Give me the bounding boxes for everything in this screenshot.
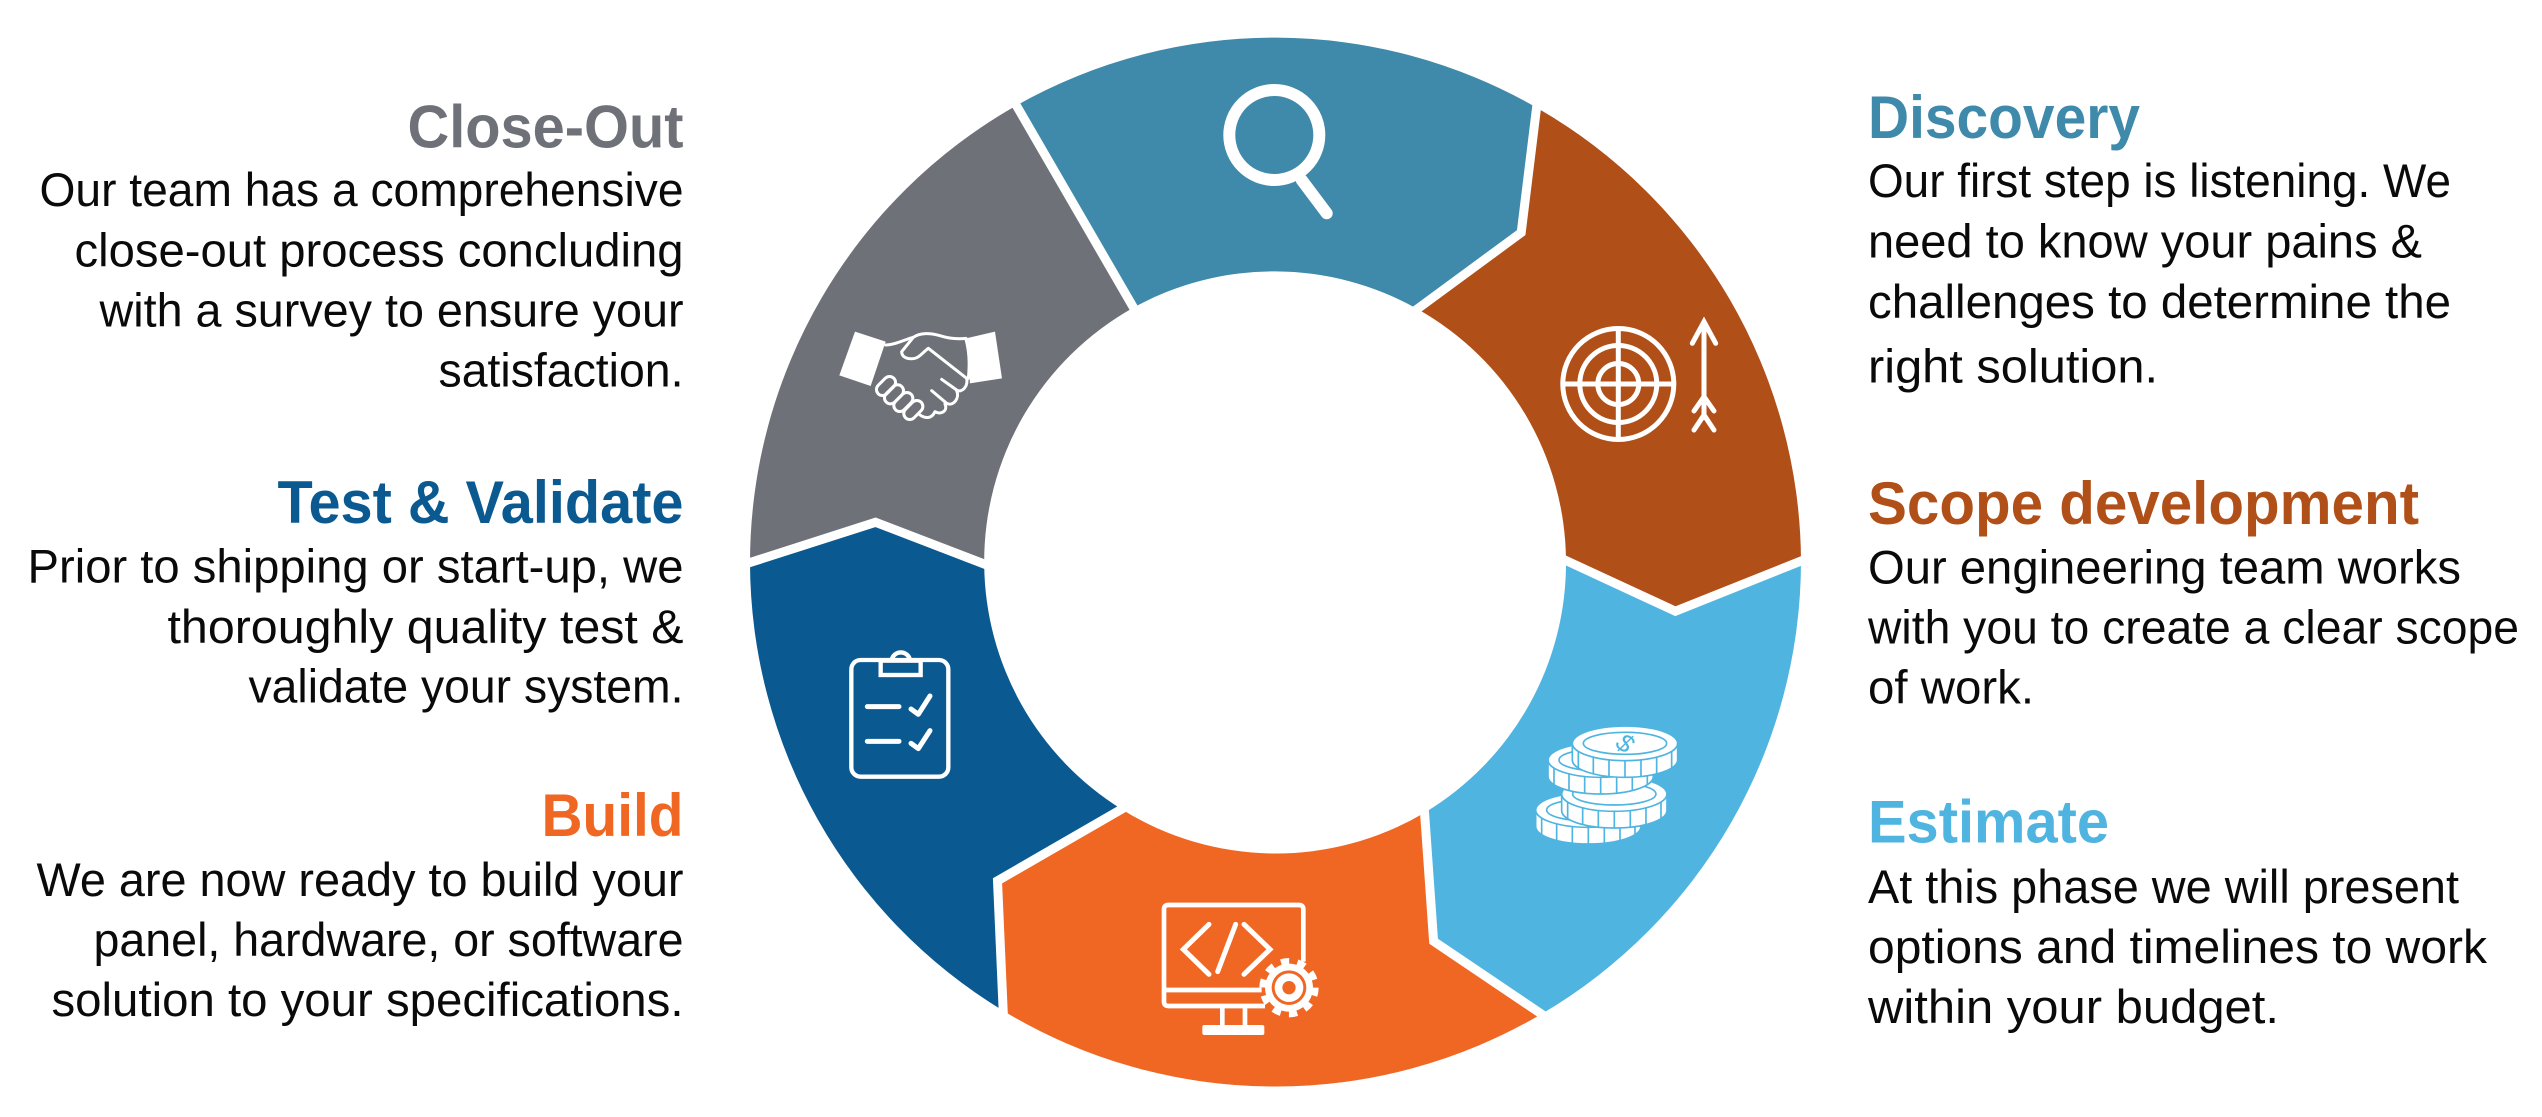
heading: scope development: Scope development — [1868, 470, 2419, 537]
body: build: panel, hardware, or software — [94, 913, 684, 966]
heading: discovery: Discovery — [1868, 84, 2141, 151]
segment: build — [998, 809, 1542, 1087]
icon: stacked coins — [1536, 726, 1678, 844]
segment: scope development — [1417, 108, 1801, 611]
heading: estimate: Estimate — [1868, 788, 2109, 856]
body: scope development: Our engineering team works — [1868, 540, 2461, 594]
body: build: solution to your specifications. — [52, 973, 684, 1026]
body: estimate — [1867, 860, 2488, 1033]
body: close-out: Our team has a comprehensive — [40, 163, 684, 216]
icon: magnifying glass — [1229, 90, 1327, 213]
segment: discovery — [1016, 38, 1537, 309]
icon: target and arrow — [1561, 322, 1716, 441]
icon: stacked coins: $ — [1610, 726, 1640, 760]
heading: test and validate: Test & Validate — [278, 469, 684, 536]
segment: close-out — [750, 106, 1134, 565]
process ring — [736, 38, 1815, 1087]
body: close-out — [40, 163, 684, 396]
body: test and validate: Prior to shipping or start-up, we — [28, 540, 684, 592]
text block: discovery — [1868, 84, 2451, 393]
icon: monitor with code and gear — [1164, 905, 1315, 1035]
body: close-out: satisfaction. — [438, 344, 684, 396]
body: close-out: with a survey to ensure your — [99, 284, 684, 336]
body: build: We are now ready to build your — [36, 853, 684, 906]
segment: estimate — [1424, 560, 1801, 1014]
segment: test and validate — [750, 522, 1122, 1011]
text block: close-out — [40, 94, 684, 396]
body: build — [36, 853, 684, 1026]
text block: build — [36, 782, 684, 1026]
text block: scope development — [1867, 470, 2519, 714]
body: discovery: right solution. — [1868, 340, 2158, 392]
heading: build: Build — [542, 782, 684, 849]
body: estimate: At this phase we will present — [1868, 860, 2459, 913]
body: close-out: close-out process concluding — [74, 224, 684, 276]
body: estimate: options and timelines to work — [1868, 920, 2488, 973]
body: test and validate: thoroughly quality test & — [168, 600, 684, 653]
body: scope development — [1867, 540, 2519, 714]
body: test and validate: validate your system. — [248, 660, 684, 712]
icon: handshake — [839, 332, 1002, 422]
body: scope development: with you to create a clear scope — [1867, 600, 2519, 654]
body: discovery: Our first step is listening. We — [1868, 154, 2451, 207]
heading: close-out: Close-Out — [408, 94, 684, 160]
body: test and validate — [28, 540, 684, 712]
icon: clipboard checklist — [851, 652, 948, 777]
body: scope development: of work. — [1868, 660, 2034, 714]
body: discovery — [1868, 154, 2451, 392]
text block: test and validate — [28, 469, 684, 712]
text block: estimate — [1867, 788, 2488, 1033]
body: discovery: need to know your pains & — [1868, 215, 2422, 268]
body: discovery: challenges to determine the — [1868, 275, 2451, 328]
body: estimate: within your budget. — [1867, 980, 2279, 1033]
